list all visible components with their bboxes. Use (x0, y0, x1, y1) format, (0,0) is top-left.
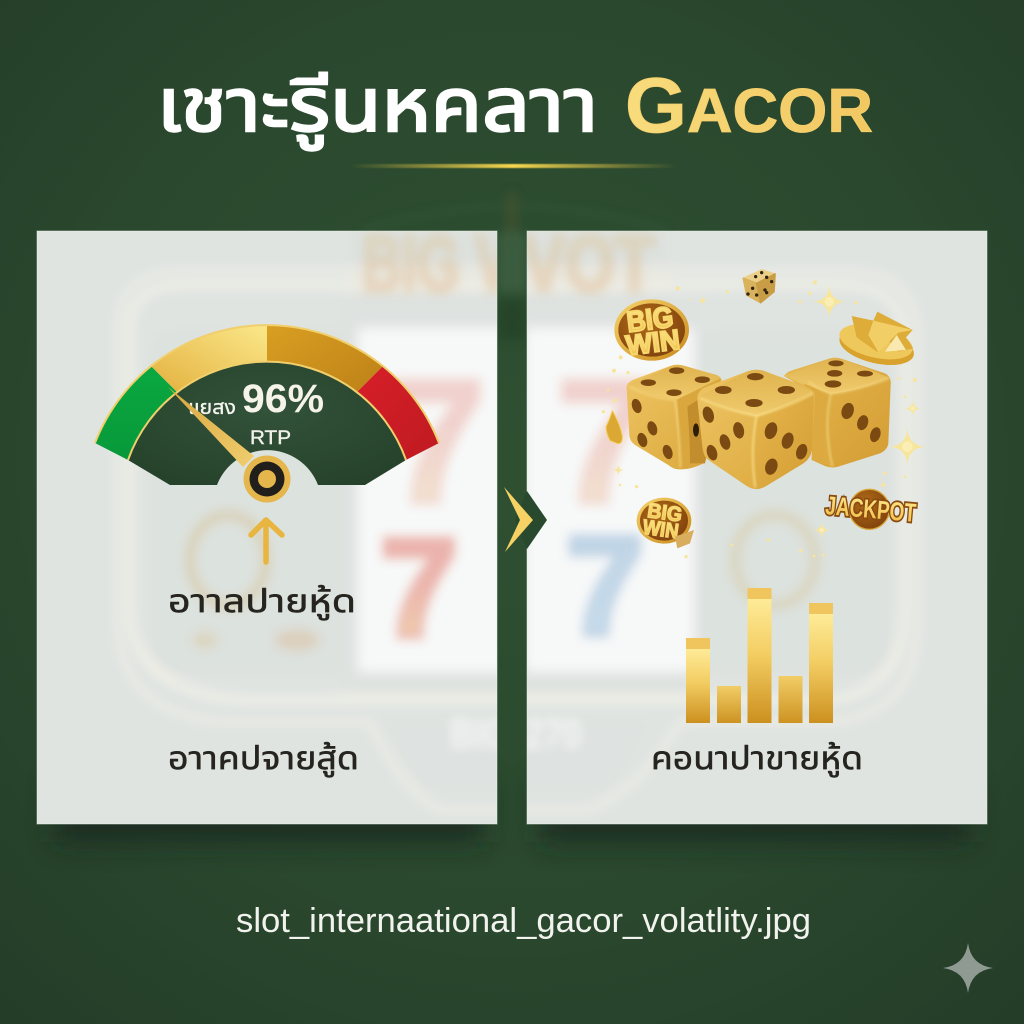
watermark sparkle (943, 943, 993, 993)
blurred reel symbols left: 7 (380, 509, 458, 666)
big win badge (614, 299, 689, 361)
label lower: อาาคปจายสู้ด (168, 740, 359, 778)
gold coin with star (836, 312, 917, 371)
gold segment left (151, 325, 267, 392)
label upper: อาาลปายหู้ด (168, 583, 356, 621)
gauge labels: RTP (250, 428, 291, 449)
small die (743, 270, 775, 303)
blurred reel symbols left: BIG V (362, 219, 512, 308)
title (157, 61, 873, 150)
red segment (357, 366, 439, 460)
gold segment right (267, 325, 383, 392)
gauge labels: แยสง (188, 397, 236, 419)
needle (168, 387, 254, 467)
title: GACOR (625, 61, 873, 149)
blurred slot machine backdrop (118, 267, 918, 815)
gauge labels (188, 377, 324, 449)
panel shadows (55, 780, 970, 842)
gauge dial body (128, 362, 406, 485)
small big win badge (637, 498, 694, 548)
file name caption: slot_internaational_gacor_volatlity.jpg (236, 902, 811, 940)
big win badge: WIN (624, 324, 682, 361)
dice illustration (602, 270, 926, 558)
small big win badge: WIN (641, 516, 680, 543)
arrow up (251, 520, 282, 562)
chevron arrow (504, 487, 547, 552)
bar chart (686, 588, 833, 723)
blurred reel symbols right: VOT (522, 219, 654, 308)
sparkles (602, 280, 926, 558)
blurred reel symbols right: 7 (566, 507, 644, 664)
gauge (95, 325, 439, 502)
big win badge: BIG (625, 301, 675, 339)
die left (627, 365, 723, 469)
jackpot badge: JACKPOT (824, 490, 917, 528)
blurred reel symbols left: 7 (388, 344, 486, 540)
label right: คอนาปาขายหู้ด (651, 740, 863, 778)
blurred reel symbols left (190, 219, 512, 757)
die centre (697, 370, 815, 489)
gauge labels: 96% (242, 377, 324, 421)
blurred reel symbols right (522, 219, 815, 757)
blurred reel symbols right: 7 (556, 344, 654, 540)
blurred reel symbols right: 270 (524, 710, 582, 757)
panel: left (37, 219, 512, 824)
golden nugget (606, 411, 622, 444)
gauge hub (244, 456, 290, 502)
die right (784, 358, 891, 468)
green segment (95, 366, 177, 460)
blurred reel symbols left: BIG (450, 710, 510, 757)
faded slot machine crest outside the panels (360, 192, 668, 340)
small big win badge: BIG (646, 499, 683, 527)
title: เชาะรูีนหคลาา (157, 64, 598, 150)
jackpot badge (824, 489, 917, 529)
panel: right (522, 219, 987, 824)
title rule (348, 164, 678, 168)
